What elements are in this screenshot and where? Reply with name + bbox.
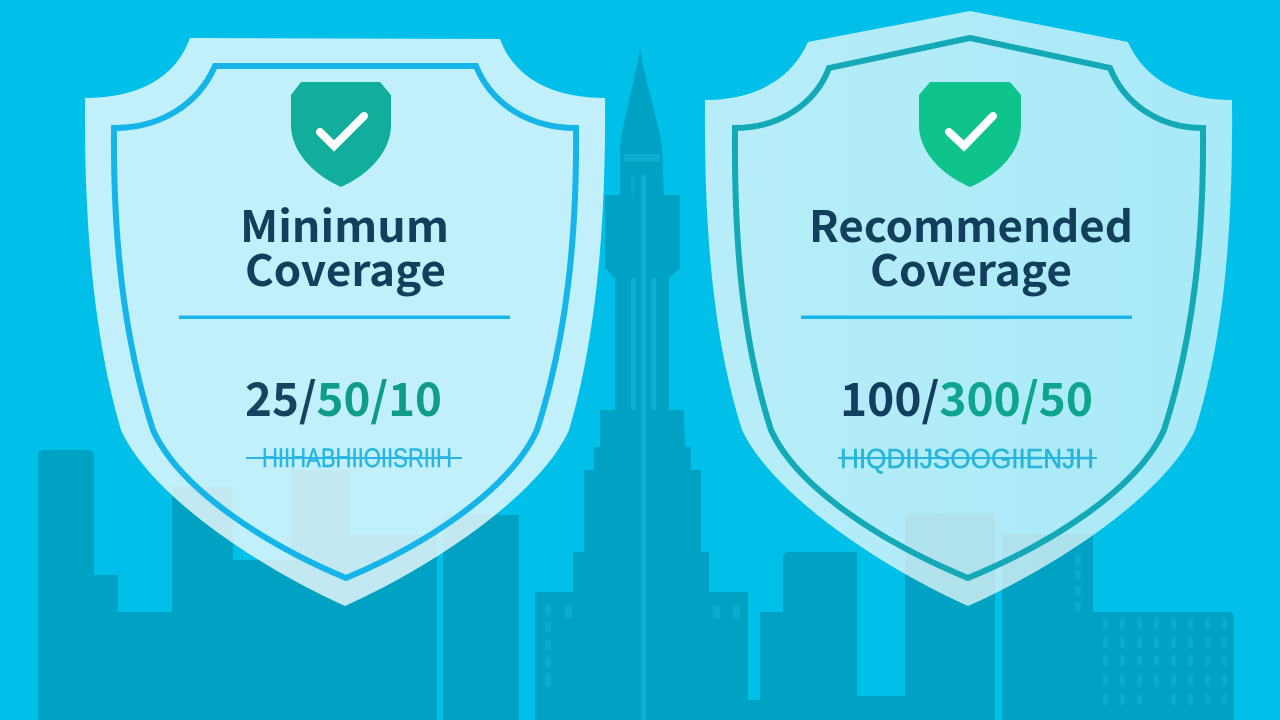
left buildings [38,450,437,720]
coverage limits: 100/300/50 [840,364,1093,430]
heading: Minimum [240,193,449,255]
heading: Coverage [245,237,446,299]
tower details [545,154,1081,720]
coverage limits: 25/50/10 [245,364,442,430]
shield inner outline [114,66,576,578]
icon: green shield with check [291,82,391,187]
heading [809,193,1133,299]
divider [801,316,1132,319]
heading [240,193,449,299]
divider [179,316,510,319]
heading: Recommended [809,193,1133,255]
window grid [1103,618,1227,705]
garbled caption: HIQDIIJSOOGIIENJH [840,443,1094,474]
garbled caption: HIIHABHIIOIISRIIH [262,443,452,473]
shield inner outline [735,38,1203,578]
shield body [705,11,1232,606]
right buildings [748,513,995,720]
icon: green shield with check [919,82,1021,187]
shield body [85,38,605,606]
panel: minimum coverage shield [85,38,605,606]
heading: Coverage [870,237,1072,299]
panel: recommended coverage shield [705,11,1232,606]
central tower [535,48,748,720]
